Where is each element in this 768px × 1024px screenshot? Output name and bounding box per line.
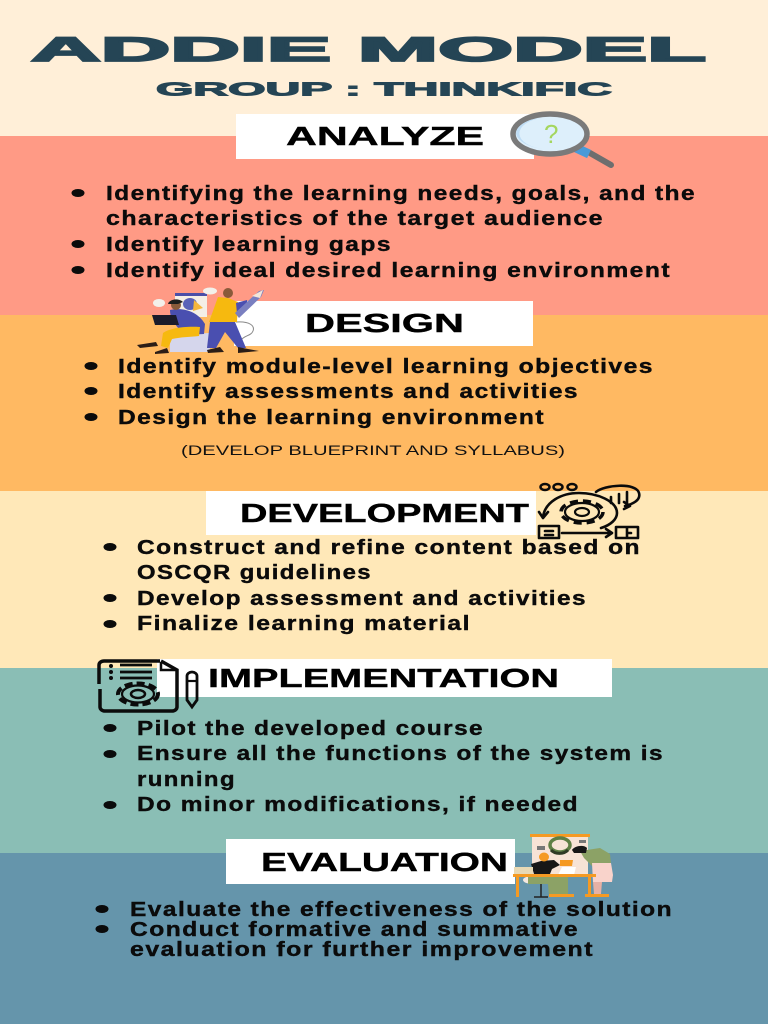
text block: evaluation bullets: evaluation for further improvement (130, 939, 594, 961)
heading: development (206, 491, 536, 535)
icon: evaluation illustration (513, 834, 613, 897)
panel: evaluation background (0, 853, 768, 1024)
icon: development cycle gear (539, 484, 639, 538)
text block: evaluation bullets (96, 899, 673, 961)
text block: development bullets: Finalize learning material (137, 613, 471, 635)
heading: development: DEVELOPMENT (240, 498, 529, 528)
panel: header background (0, 0, 768, 136)
text block: analyze bullets: Identify ideal desired learning environment (106, 260, 671, 282)
text block: development bullets: OSCQR guidelines (137, 562, 372, 584)
heading: analyze (236, 114, 534, 159)
panel: design background (0, 315, 768, 491)
text block: design bullets: Identify module-level learning objectives (118, 356, 654, 378)
panel: analyze background (0, 136, 768, 315)
text block: design bullets (84, 356, 654, 429)
note: develop blueprint and syllabus: (DEVELOP BLUEPRINT AND SYLLABUS) (181, 443, 565, 458)
icon: magnifying glass: ? (544, 119, 558, 149)
text block: implementation bullets: Do minor modifications, if needed (137, 794, 579, 816)
text block: analyze bullets (72, 183, 696, 282)
text block: implementation bullets: running (137, 769, 236, 791)
panel: development background (0, 491, 768, 668)
text block: implementation bullets: Pilot the developed course (137, 718, 484, 740)
heading: evaluation (226, 839, 515, 884)
text block: analyze bullets: Identifying the learning needs, goals, and the (106, 183, 696, 205)
title: ADDIE MODEL (31, 31, 706, 69)
text block: design bullets: Identify assessments and activities (118, 381, 579, 403)
icon: magnifying glass (513, 114, 611, 165)
text block: development bullets: Develop assessment and activities (137, 588, 587, 610)
text block: implementation bullets: Ensure all the functions of the system is (137, 743, 664, 765)
heading: analyze: ANALYZE (286, 121, 484, 151)
heading: design (234, 301, 533, 346)
heading: design: DESIGN (305, 308, 464, 338)
subtitle: GROUP : THINKIFIC (156, 78, 612, 100)
text block: evaluation bullets: Conduct formative and summative (130, 919, 579, 941)
heading: implementation: IMPLEMENTATION (208, 663, 559, 693)
text block: analyze bullets: characteristics of the target audience (106, 208, 604, 230)
icon: document with gear and pencil (99, 661, 197, 711)
text block: evaluation bullets: Evaluate the effectiveness of the solution (130, 899, 673, 921)
text block: design bullets: Design the learning environment (118, 407, 545, 429)
text block: development bullets (104, 537, 641, 635)
panel: implementation background (0, 668, 768, 853)
heading: implementation (157, 659, 612, 697)
heading: evaluation: EVALUATION (261, 847, 508, 877)
text block: implementation bullets (104, 718, 664, 816)
text block: analyze bullets: Identify learning gaps (106, 234, 392, 256)
text block: development bullets: Construct and refine content based on (137, 537, 641, 559)
icon: designers illustration (137, 288, 264, 354)
